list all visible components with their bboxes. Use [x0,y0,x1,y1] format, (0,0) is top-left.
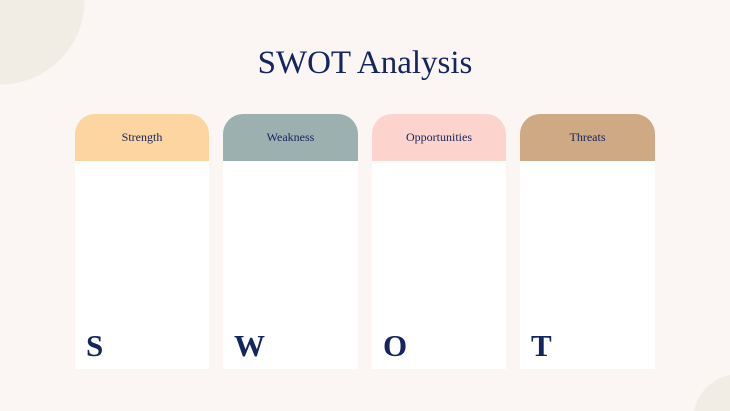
header: opportunities [372,114,506,161]
header: opportunities: Opportunities [406,130,472,144]
title: SWOT Analysis [258,45,472,81]
body: O: O [383,328,407,363]
body: T: T [531,328,552,363]
header: strength [75,114,209,161]
header: threats [520,114,655,161]
body: T [520,161,655,369]
decorative circle bottom-right [693,374,730,411]
panel: weakness [223,114,358,369]
panel: opportunities [372,114,506,369]
body: W: W [234,328,265,363]
body: S [75,161,209,369]
body: S: S [86,328,103,363]
header: weakness [223,114,358,161]
body: W [223,161,358,369]
body: O [372,161,506,369]
panel: threats [520,114,655,369]
header: threats: Threats [570,130,605,144]
decorative circle top-left [0,0,86,86]
header: weakness: Weakness [267,130,314,144]
header: strength: Strength [122,130,162,144]
panel: strength [75,114,209,369]
